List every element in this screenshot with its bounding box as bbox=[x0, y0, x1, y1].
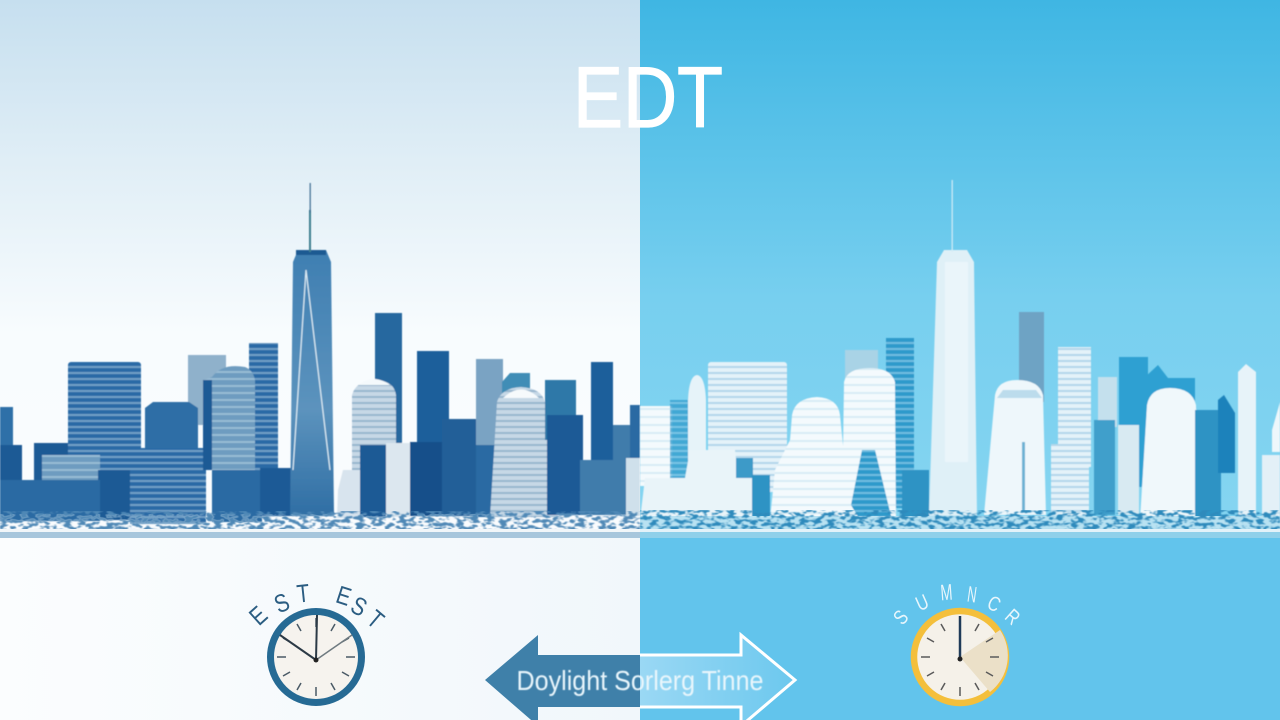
clock label: EST EST: S bbox=[346, 590, 372, 622]
clock label: summer: C bbox=[984, 590, 1005, 617]
panel: EDT summer side background bbox=[640, 0, 1280, 720]
clock label: EST EST: T bbox=[362, 604, 390, 634]
clock label: summer: N bbox=[966, 581, 978, 608]
skyline: pale summer city bbox=[640, 180, 1280, 523]
clock label: summer bbox=[888, 581, 1025, 629]
title: EDT: EDT bbox=[573, 50, 723, 146]
clock label: EST EST: S bbox=[270, 587, 293, 619]
panel: EST winter side background bbox=[0, 0, 640, 720]
clock label: summer: U bbox=[912, 589, 932, 615]
skyline: blue winter city bbox=[0, 183, 640, 524]
arrow label: Daylight Saving Time: Doylight Sorlerg Tinne bbox=[516, 665, 764, 696]
clock label: summer: S bbox=[888, 605, 913, 629]
arrow: left dark half bbox=[485, 635, 640, 720]
clock label: EST EST: E bbox=[243, 600, 273, 631]
clock: summer bbox=[914, 611, 1008, 703]
clock label: EST EST bbox=[243, 578, 390, 634]
arrow: right light half bbox=[640, 635, 795, 720]
waterline strip bbox=[0, 529, 1280, 538]
clock label: summer: M bbox=[940, 581, 953, 606]
clock: EST bbox=[270, 612, 362, 702]
clock label: EST EST: T bbox=[295, 578, 311, 608]
tree line along the waterfront bbox=[0, 510, 1280, 530]
clock label: summer: R bbox=[1001, 604, 1025, 629]
clock label: EST EST: E bbox=[333, 580, 355, 611]
